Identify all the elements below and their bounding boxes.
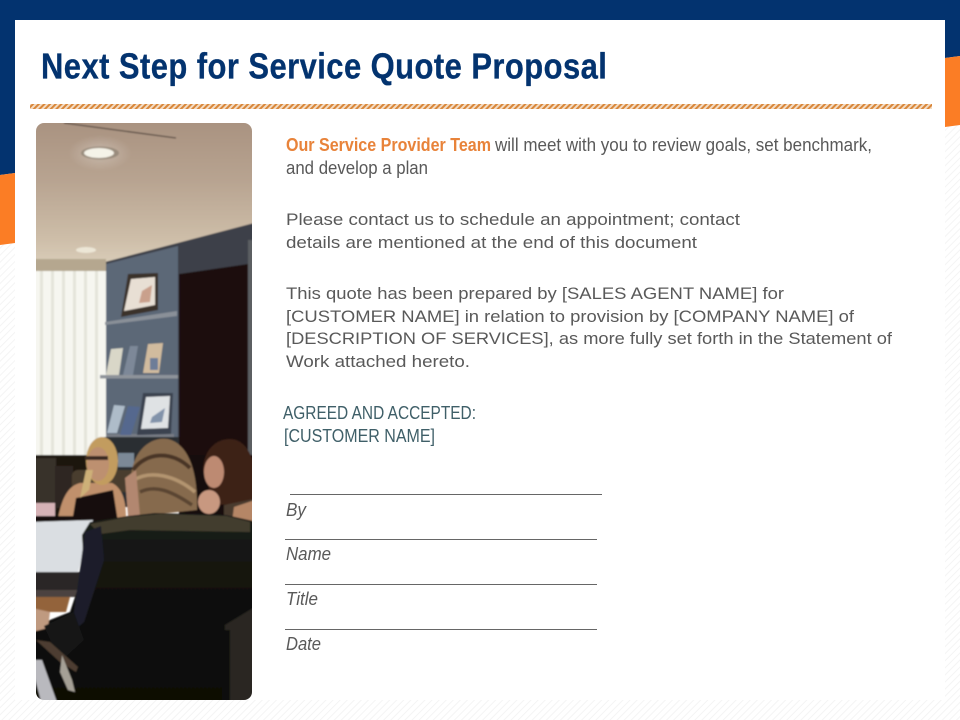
window blinds — [30, 271, 106, 456]
pink item — [36, 502, 56, 518]
contact paragraph: details are mentioned at the end of this document — [286, 233, 697, 252]
title divider — [30, 104, 932, 109]
framed pictures and books — [121, 273, 158, 317]
quote statement paragraph: [DESCRIPTION OF SERVICES], as more fully set forth in the Statement of — [286, 329, 892, 348]
woman from behind, hair — [125, 439, 197, 516]
left navy band — [0, 0, 15, 175]
woman with glasses — [58, 437, 126, 522]
right orange accent — [945, 56, 960, 127]
agreed and accepted heading: [CUSTOMER NAME] — [284, 426, 435, 446]
top navy band — [0, 0, 960, 20]
gray wall — [105, 222, 252, 438]
photo: team meeting in office — [30, 118, 259, 705]
contact paragraph: Please contact us to schedule an appointment; contact — [286, 210, 740, 229]
signature block — [285, 494, 602, 654]
quote statement paragraph — [286, 284, 892, 371]
quote statement paragraph: This quote has been prepared by [SALES AGENT NAME] for — [286, 284, 784, 303]
laptop — [36, 515, 74, 520]
ceiling — [36, 123, 252, 262]
agreed and accepted heading — [283, 403, 476, 446]
title: Next Step for Service Quote Proposal — [41, 47, 607, 87]
signature block: By — [286, 500, 307, 520]
woman with dark hair — [197, 438, 252, 522]
left orange accent — [0, 173, 15, 245]
intro paragraph: Our Service Provider Team — [286, 135, 491, 155]
signature block: Date — [286, 634, 321, 654]
table — [30, 597, 70, 612]
quote statement paragraph: Work attached hereto. — [286, 352, 470, 371]
contact paragraph — [286, 210, 740, 252]
right navy band — [945, 20, 960, 58]
back wall furniture — [36, 454, 88, 518]
dark doorway — [178, 264, 248, 456]
intro paragraph — [286, 135, 872, 178]
signature block: Name — [286, 544, 331, 564]
quote statement paragraph: [CUSTOMER NAME] in relation to provision by [COMPANY NAME] of — [286, 307, 854, 326]
chair and person — [30, 513, 258, 705]
intro paragraph: will meet with you to review goals, set benchmark, — [494, 135, 872, 155]
agreed and accepted heading: AGREED AND ACCEPTED: — [283, 403, 476, 423]
intro paragraph: and develop a plan — [286, 158, 428, 178]
shelves — [105, 311, 177, 325]
window valance — [30, 259, 106, 272]
signature block: Title — [286, 589, 318, 609]
